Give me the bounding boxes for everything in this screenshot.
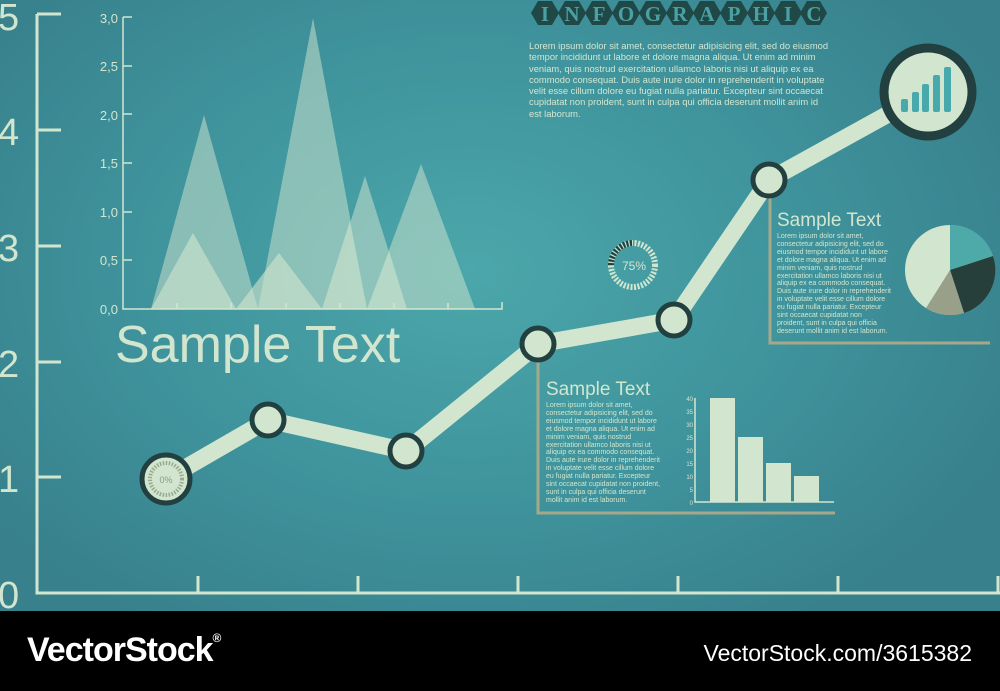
bar chart: 15 xyxy=(686,462,694,468)
panel: pie text: Lorem ipsum dolor sit amet, consectetur adipisicing elit, sed do eiusmod tempor incididunt ut labore et dolore magna aliqua. Ut enim ad minim veniam, quis nostrud exercitation ullamco laboris nisi ut aliquip ex ea commodo consequat. Duis aute irure dolor in reprehenderit in voluptate velit esse cillum dolore eu fugiat nulla pariatur. Excepteur sint occaecat cupidatat non proident, sunt in culpa qui officia deserunt mollit anim id est laborum. xyxy=(777,233,891,335)
title hexagons: P xyxy=(728,2,741,26)
75% ring: 75% xyxy=(622,259,646,273)
title hexagons: H xyxy=(753,2,769,26)
bar chart xyxy=(686,397,834,507)
mini triangle chart: 0,0 xyxy=(100,302,118,317)
title hexagons: R xyxy=(672,2,688,26)
footer logo: VectorStock® xyxy=(27,631,220,669)
mini triangle chart: 2,5 xyxy=(100,59,118,74)
title hexagons: A xyxy=(699,2,715,26)
line graph xyxy=(166,92,928,479)
start node 0%: 0% xyxy=(159,475,173,485)
bar chart: 40 xyxy=(686,397,694,403)
75% ring xyxy=(611,243,655,287)
panel: bar chart text: Lorem ipsum dolor sit amet, consectetur adipisicing elit, sed do eiusmod tempor incididunt ut labore et dolore magna aliqua. Ut enim ad minim veniam, quis nostrud exercitation ullamco laboris nisi ut aliquip ex ea commodo consequat. Duis aute irure dolor in reprehenderit in voluptate velit esse cillum dolore eu fugiat nulla pariatur. Excepteur sint occaecat cupidatat non proident, sunt in culpa qui officia deserunt mollit anim id est laborum. xyxy=(546,402,660,504)
title hexagons: C xyxy=(806,2,822,26)
mini triangle chart: 1,0 xyxy=(100,205,118,220)
bar chart: 25 xyxy=(686,436,694,442)
end node bar icon xyxy=(884,48,972,136)
title hexagons: I xyxy=(784,2,792,26)
intro paragraph: Lorem ipsum dolor sit amet, consectetur adipisicing elit, sed do eiusmod tempor incididunt ut labore et dolore magna aliqua. Ut enim ad minim veniam, quis nostrud exercitation ullamco laboris nisi ut aliquip ex ea commodo consequat. Duis aute irure dolor in reprehenderit in voluptate velit esse cillum dolore eu fugiat nulla pariatur. Excepteur sint occaecat cupidatat non proident, sunt in culpa qui officia deserunt mollit anim id est laborum. xyxy=(529,40,828,119)
bar chart: 20 xyxy=(686,449,694,455)
title hexagons: N xyxy=(564,2,580,26)
mini triangle chart: 0,5 xyxy=(100,253,118,268)
panel: bar chart text: Sample Text xyxy=(546,379,650,400)
bar chart: 10 xyxy=(686,475,694,481)
bar chart: 35 xyxy=(686,410,694,416)
pie chart xyxy=(905,225,995,315)
footer url: VectorStock.com/3615382 xyxy=(704,640,972,666)
footer xyxy=(0,611,1000,691)
axis labels xyxy=(0,0,19,617)
bar chart: 5 xyxy=(690,488,694,494)
bar chart: 30 xyxy=(686,423,694,429)
mini triangle chart xyxy=(100,11,502,317)
panel: pie text: Sample Text xyxy=(777,210,881,231)
start node 0% xyxy=(142,455,190,503)
big sample text: Sample Text xyxy=(115,316,400,374)
title hexagons: I xyxy=(541,2,549,26)
title hexagons xyxy=(531,1,827,26)
bar chart: 0 xyxy=(690,501,694,507)
title hexagons: F xyxy=(593,2,605,26)
title hexagons: G xyxy=(645,2,661,26)
mini triangle chart: 3,0 xyxy=(100,11,118,26)
title hexagons: O xyxy=(618,2,634,26)
mini triangle chart: 2,0 xyxy=(100,108,118,123)
panel borders xyxy=(538,180,990,513)
mini triangle chart: 1,5 xyxy=(100,156,118,171)
